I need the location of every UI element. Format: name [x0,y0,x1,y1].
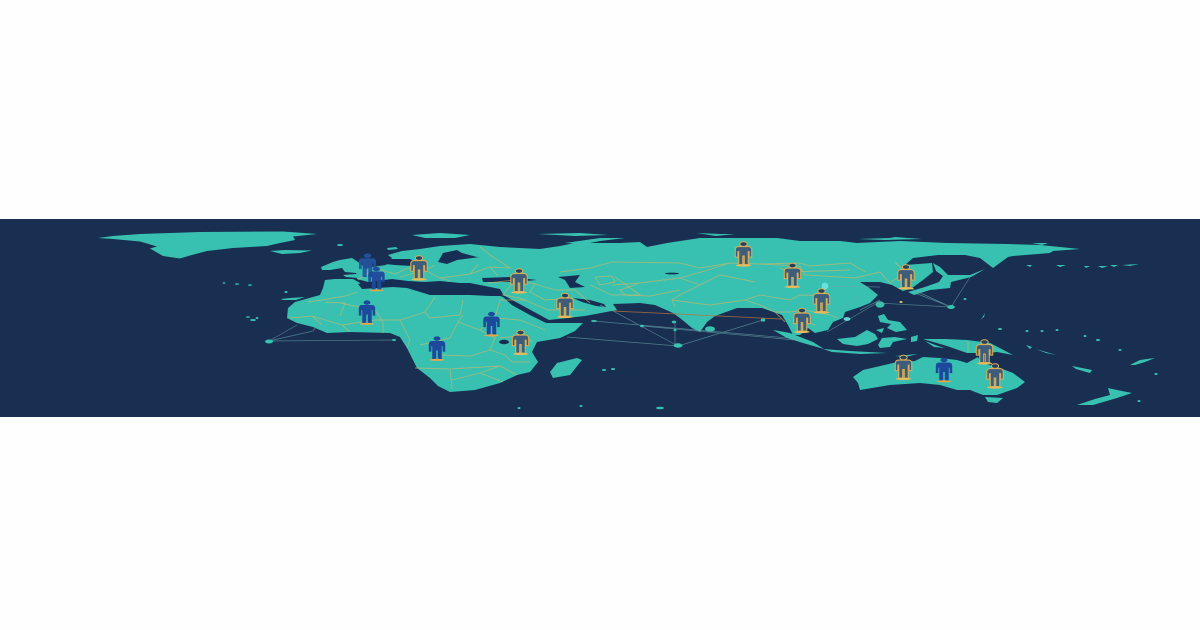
borders: Central and South Asia [560,262,865,325]
person: Korea [898,265,914,290]
navy map background [0,219,1200,417]
Sulawesi and Moluccas [878,335,918,348]
land masses [98,232,1158,409]
Sakhalin and Kuril chain [1026,264,1139,268]
small scattered islands [223,244,1158,409]
person: New Guinea [976,340,993,365]
Greenland [98,232,317,258]
person: Russia [735,242,752,267]
network connection lines [269,277,970,346]
Black Sea [482,277,537,282]
Lake Victoria [499,340,509,344]
borders: Africa [290,292,545,388]
Red Sea [502,296,548,323]
person: East Africa [512,330,529,355]
Caspian Sea [558,275,585,288]
borders: East Asia [760,262,905,283]
Borneo [837,330,878,346]
Java and Lesser Sunda islands [823,341,945,357]
Philippines [876,314,907,333]
borders: Australia and New Guinea [967,341,969,352]
person: Central Africa [429,336,445,361]
United Kingdom and Ireland [321,258,368,278]
network nodes [265,305,955,348]
Madagascar [550,358,582,378]
Taiwan [876,301,884,308]
Baltic Sea [438,250,480,264]
person: Southeast Asia [794,308,810,333]
Australia [853,357,1025,395]
person: eastern Australia [987,364,1003,389]
Pacific islands [980,313,1155,373]
Lake Baikal [665,273,679,274]
person: West Africa [359,300,375,325]
Japan [908,263,985,295]
inland seas [358,250,679,344]
New Zealand [1077,388,1132,405]
orange route line [613,311,781,319]
Tasmania [985,397,1003,403]
country borders [290,247,968,388]
person: France [368,267,385,291]
person: China [784,263,801,288]
person: central Europe [411,256,427,281]
North Sea [372,259,416,266]
Eurasia [356,238,1080,335]
person: western Australia [895,355,912,380]
person: southern China [813,289,830,314]
person: Sudan [483,312,500,336]
person: UK large [359,254,376,277]
glowing nodes [822,283,903,321]
Mediterranean Sea [358,279,504,296]
Africa and Iberia [287,279,583,392]
Iceland [270,250,312,254]
person: central Australia [936,358,952,382]
person icons [359,242,1003,389]
New Guinea [923,339,1013,355]
Arctic and northern islands [387,233,1048,250]
map artwork [98,232,1158,409]
borders: Europe [358,247,510,281]
person: Arabia [557,293,573,318]
borders: Middle East [488,277,640,310]
Sumatra [773,330,824,349]
Persian Gulf [573,298,606,307]
person: Turkey [511,269,527,294]
